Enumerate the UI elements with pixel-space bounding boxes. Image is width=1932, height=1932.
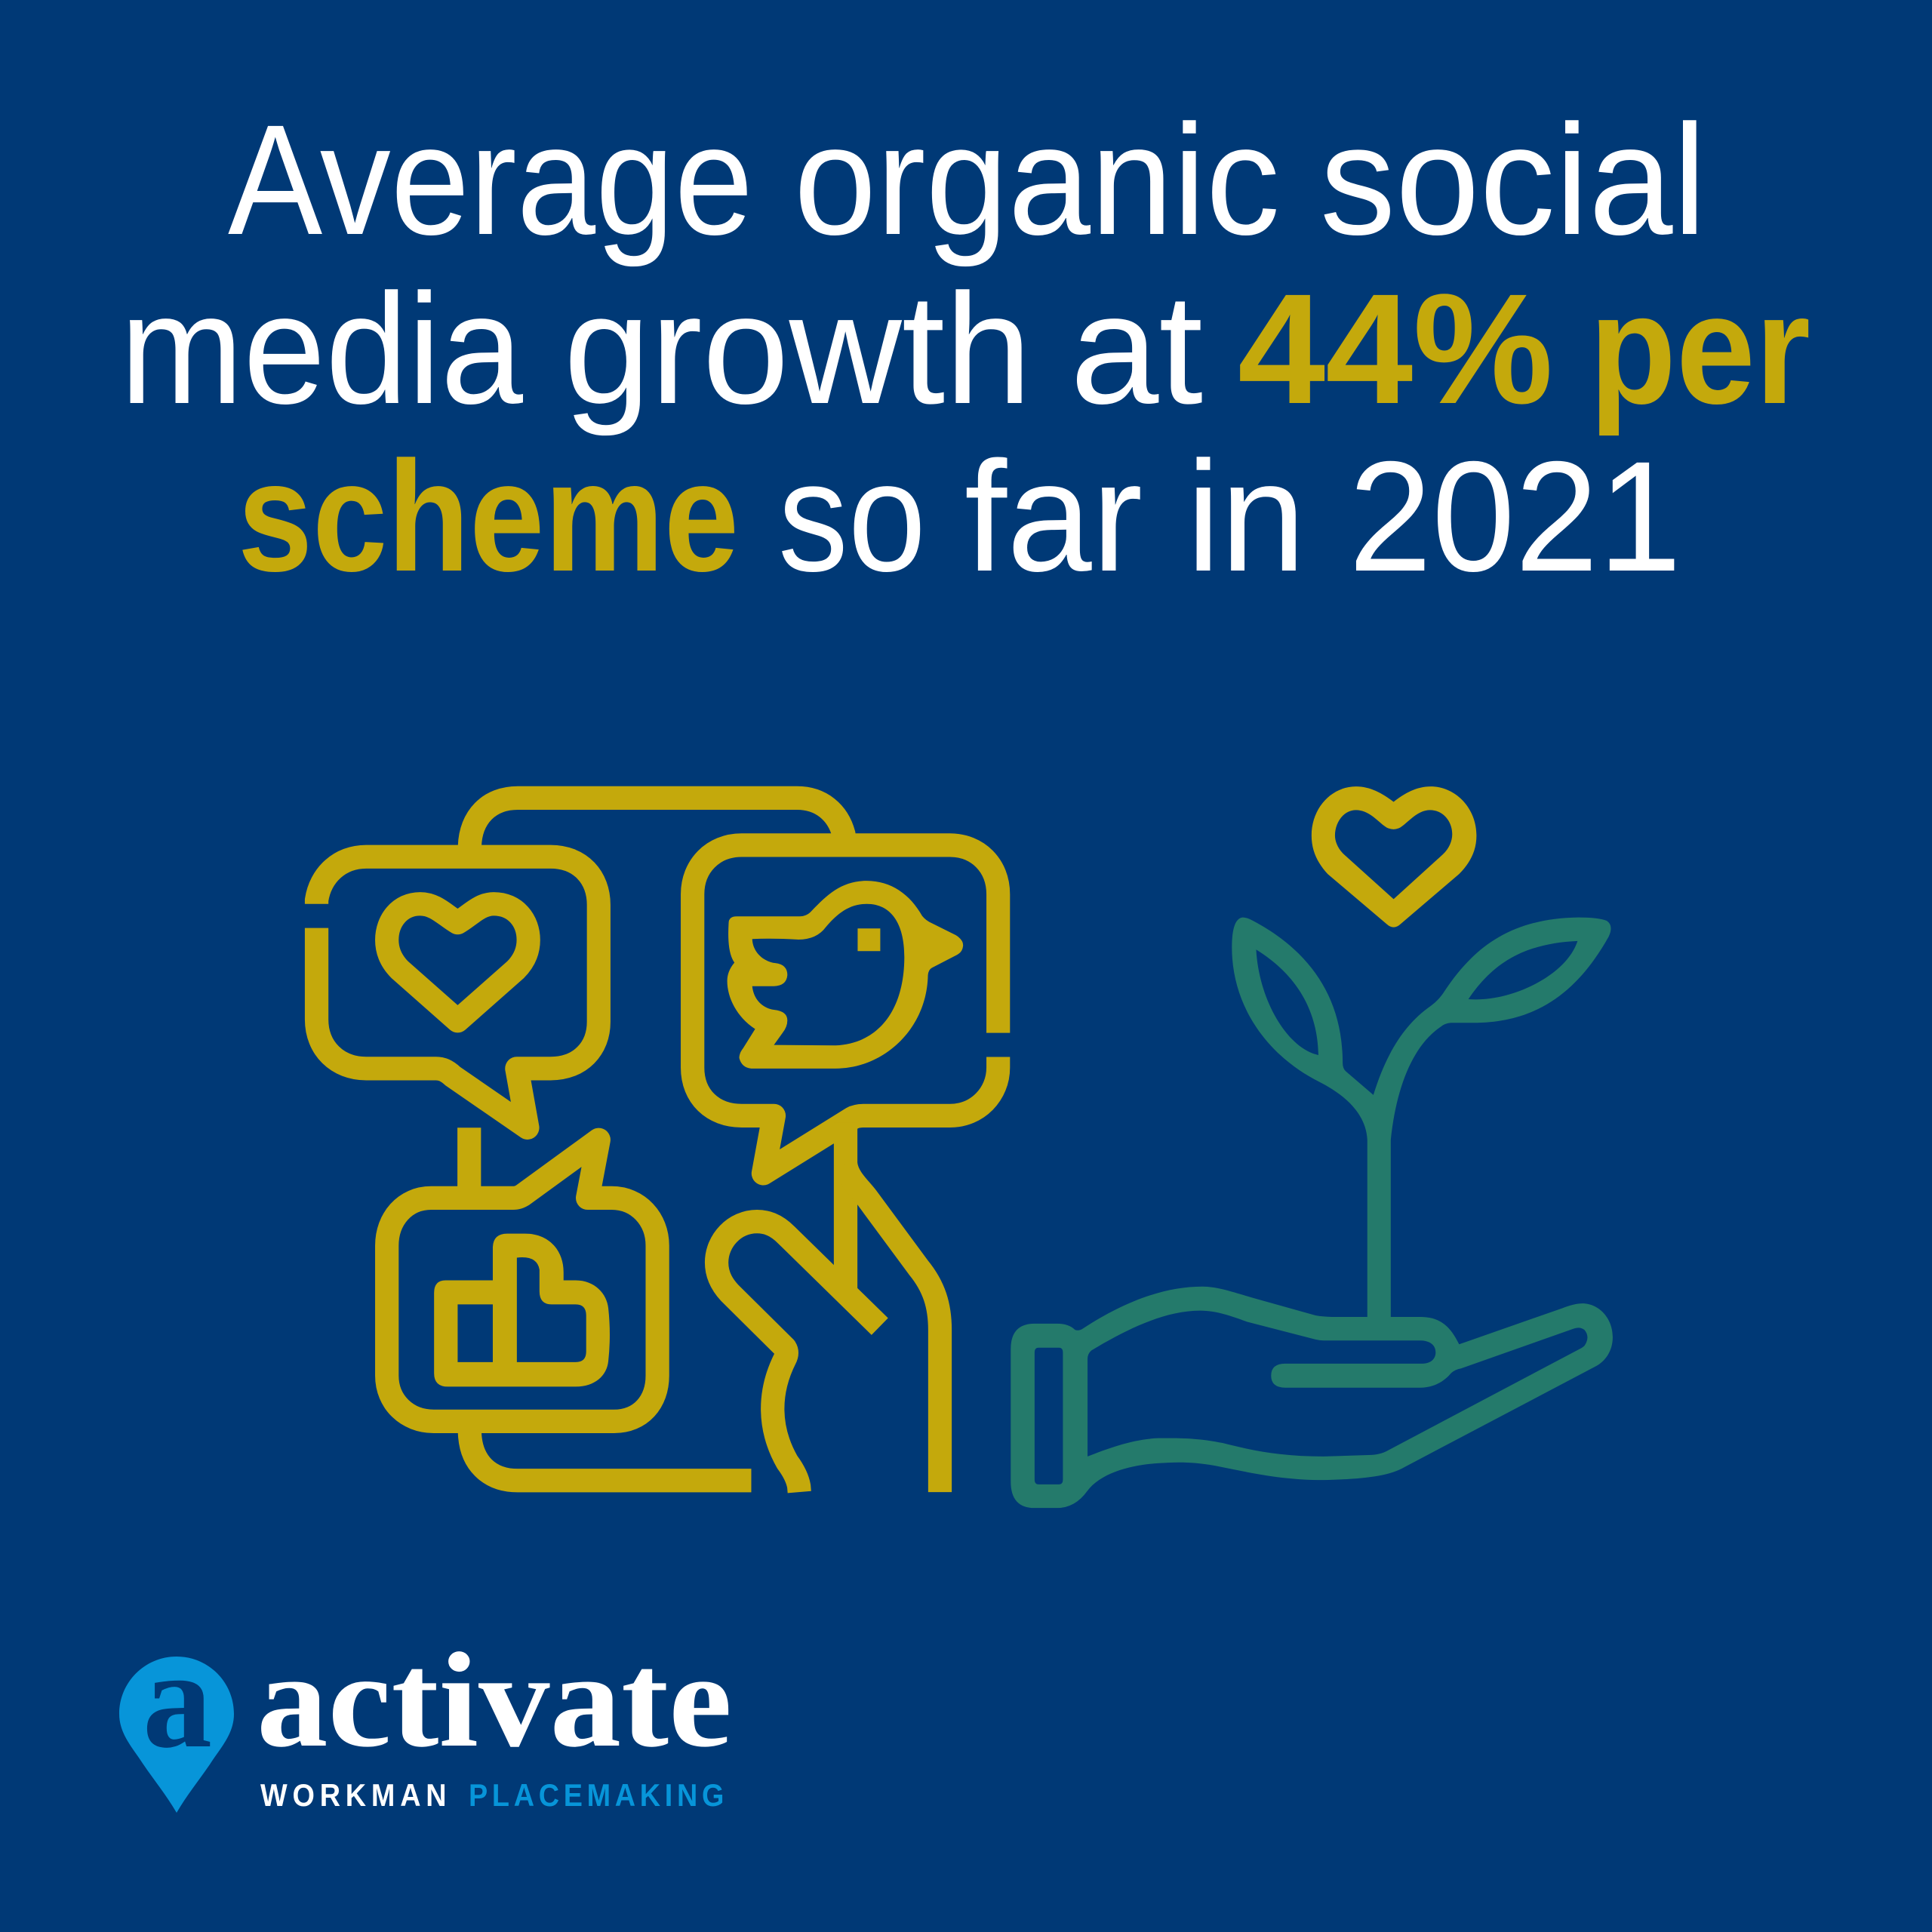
open hand [1011, 1287, 1613, 1508]
title line 3: scheme [238, 429, 739, 605]
logo strapline: WORKMAN [260, 1778, 447, 1813]
icon: heart in bubble [387, 904, 528, 1021]
title line 3: far [964, 429, 1143, 605]
connector stem to thumbs-up bubble [451, 1128, 488, 1200]
title line 2: growth [564, 262, 1032, 437]
logo [119, 1622, 732, 1813]
speech bubble: heart [317, 857, 598, 1128]
title [120, 93, 1810, 605]
icon: thumbs up [434, 1234, 610, 1386]
speech bubble: thumbs up [387, 1140, 657, 1421]
title line 2: media [120, 262, 523, 437]
title line 2: per [1589, 262, 1810, 437]
title line 2: at [1070, 262, 1203, 437]
hand: finger [717, 1222, 880, 1492]
logo pin with letter a [119, 1622, 234, 1813]
seedling [1232, 918, 1611, 1323]
title line 3 [238, 429, 1681, 605]
title line 2 [120, 262, 1810, 437]
title line 3: 2021 [1349, 429, 1681, 605]
title line 2: 44% [1238, 262, 1553, 437]
title line 1: organic [794, 93, 1280, 268]
phone outline top [469, 798, 845, 846]
icon: floating heart [1312, 786, 1476, 928]
logo pin with letter a: a [143, 1622, 212, 1777]
logo strapline: PLACEMAKING [469, 1778, 724, 1813]
logo wordmark activate: activate [257, 1625, 732, 1775]
icon: phone in hand with social media speech bubbles [317, 798, 998, 1492]
title line 1: Average [228, 93, 753, 268]
phone outline bottom [469, 1432, 751, 1481]
hand: phone edge [827, 1123, 864, 1289]
icon: open hand holding seedling with heart [1011, 786, 1613, 1508]
speech bubble: bird [693, 845, 998, 1174]
logo strapline [260, 1778, 724, 1813]
title line 3: so [778, 429, 926, 605]
title line 3: in [1186, 429, 1306, 605]
icon: bird [728, 881, 963, 1069]
hand: back of hand [845, 1164, 940, 1492]
title line 1: social [1320, 93, 1706, 268]
title line 1 [228, 93, 1706, 268]
